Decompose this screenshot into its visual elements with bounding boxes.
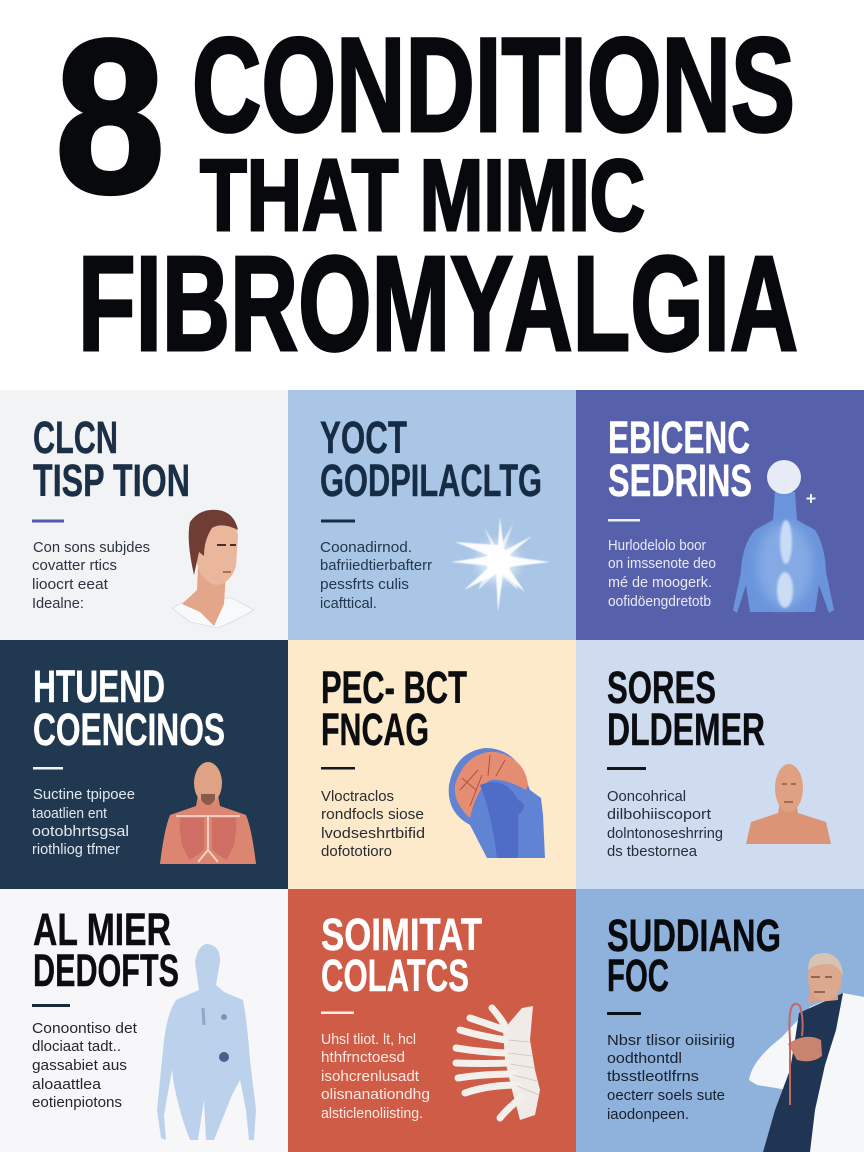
icon: white rib cage and spine [456, 1006, 540, 1120]
icon: man's head and shoulders [172, 510, 254, 628]
body text [608, 538, 716, 610]
body text: mé de moogerk. [608, 575, 712, 591]
body text: ootobhrtsgsal [32, 824, 129, 840]
panel: pec-bct fncag [288, 640, 576, 889]
body text [607, 789, 723, 860]
icon: doctor with stethoscope [749, 953, 864, 1152]
heading: SUDDIANG [607, 910, 781, 961]
body text [32, 540, 150, 612]
heading [320, 412, 542, 506]
body text [607, 1033, 735, 1123]
heading: SOIMITAT [321, 909, 482, 960]
body text: Conoontiso det [32, 1021, 137, 1037]
title line: that mimic: THAT MIMIC [200, 140, 645, 252]
body text: riothliog tfmer [32, 842, 120, 858]
body text: dolntonoseshrring [607, 826, 723, 842]
body text: tbsstleotlfrns [607, 1069, 699, 1085]
body text: aloaattlea [32, 1077, 102, 1093]
body text: olisnanationdhg [321, 1087, 430, 1103]
heading: PEC- BCT [321, 662, 467, 713]
body text: covatter rtics [32, 558, 117, 574]
icon: plus mark [806, 494, 816, 503]
heading [33, 412, 190, 506]
body text: oofidöengdretotb [608, 594, 711, 610]
body text: Coonadirnod. [320, 540, 412, 556]
body text: Hurlodelolo boor [608, 538, 706, 554]
icon: brain cross-section in head [449, 748, 545, 858]
panel: yoct godpilacltg [288, 390, 576, 640]
panel: ebicenc sedrins [576, 390, 864, 640]
body text: oecterr soels sute [607, 1088, 725, 1104]
body text: icafttical. [320, 596, 377, 612]
heading [33, 661, 225, 755]
body text: lioocrt eeat [32, 577, 108, 593]
body text: Vloctraclos [321, 789, 394, 805]
panel: clcn tisp tion [0, 390, 288, 640]
body text: ds tbestornea [607, 844, 698, 860]
icon: translucent blue body with glowing head [733, 460, 834, 613]
body text: Suctine tpipoee [33, 787, 135, 803]
body text: alsticlenoliisting. [321, 1106, 423, 1122]
heading: DLDEMER [607, 704, 765, 755]
icon: white pain starburst [451, 517, 550, 612]
body text: on imssenote deo [608, 556, 716, 572]
body text: gassabiet aus [32, 1058, 127, 1074]
heading [321, 662, 467, 755]
body text: hthfrnctoesd [321, 1050, 405, 1066]
body text: Uhsl tliot. lt, hcl [321, 1032, 416, 1048]
body text [321, 789, 425, 860]
body text: rondfocls siose [321, 807, 424, 823]
body text [321, 1032, 430, 1122]
body text: dilbohiiscoport [607, 807, 711, 823]
body text: bafriiedtierbafterr [320, 558, 432, 574]
heading: SORES [607, 662, 716, 713]
panel: sores dldemer [576, 640, 864, 889]
heading: TISP TION [33, 455, 190, 506]
heading [33, 904, 179, 996]
body text: taoatlien ent [32, 806, 107, 822]
body text: dofototioro [321, 844, 392, 860]
body text [32, 1021, 137, 1111]
heading: FOC [607, 950, 669, 1001]
body text: oodthontdl [607, 1051, 682, 1067]
body text: Idealne: [32, 596, 84, 612]
heading: FNCAG [321, 704, 429, 755]
icon: bald figure bust [746, 764, 831, 844]
heading [321, 909, 482, 1001]
panel: htuend coencinos [0, 640, 288, 889]
panel: soimitat colatcs [288, 889, 576, 1152]
body text [32, 787, 135, 858]
panel: al mier dedofts [0, 889, 288, 1152]
title [55, 0, 798, 379]
heading: COENCINOS [33, 704, 225, 755]
body text: pessfrts culis [320, 577, 409, 593]
heading: AL MIER [33, 904, 171, 955]
heading [608, 412, 752, 506]
heading: YOCT [320, 412, 407, 463]
heading: HTUEND [33, 661, 165, 712]
body text: lvodseshrtbifid [321, 826, 425, 842]
heading: CLCN [33, 412, 118, 463]
heading: COLATCS [321, 950, 469, 1001]
body text: eotienpiotons [32, 1095, 122, 1111]
heading: EBICENC [608, 412, 750, 463]
heading: DEDOFTS [33, 945, 179, 996]
body text: Ooncohrical [607, 789, 686, 805]
body text: Con sons subjdes [33, 540, 150, 556]
heading [607, 910, 781, 1001]
body text: isohcrenlusadt [321, 1069, 419, 1085]
body text [320, 540, 432, 612]
panel: suddiang foc [576, 889, 864, 1152]
body text: Nbsr tlisor oiisiriig [607, 1033, 735, 1049]
heading [607, 662, 765, 755]
heading: GODPILACLTG [320, 455, 542, 506]
body text: iaodonpeen. [607, 1107, 689, 1123]
body text: dlociaat tadt.. [32, 1039, 121, 1055]
icon: torso with lungs [160, 762, 256, 864]
icon: pale blue body silhouette [157, 944, 256, 1140]
heading: SEDRINS [608, 455, 752, 506]
title numeral 8: 8 [55, 0, 165, 239]
